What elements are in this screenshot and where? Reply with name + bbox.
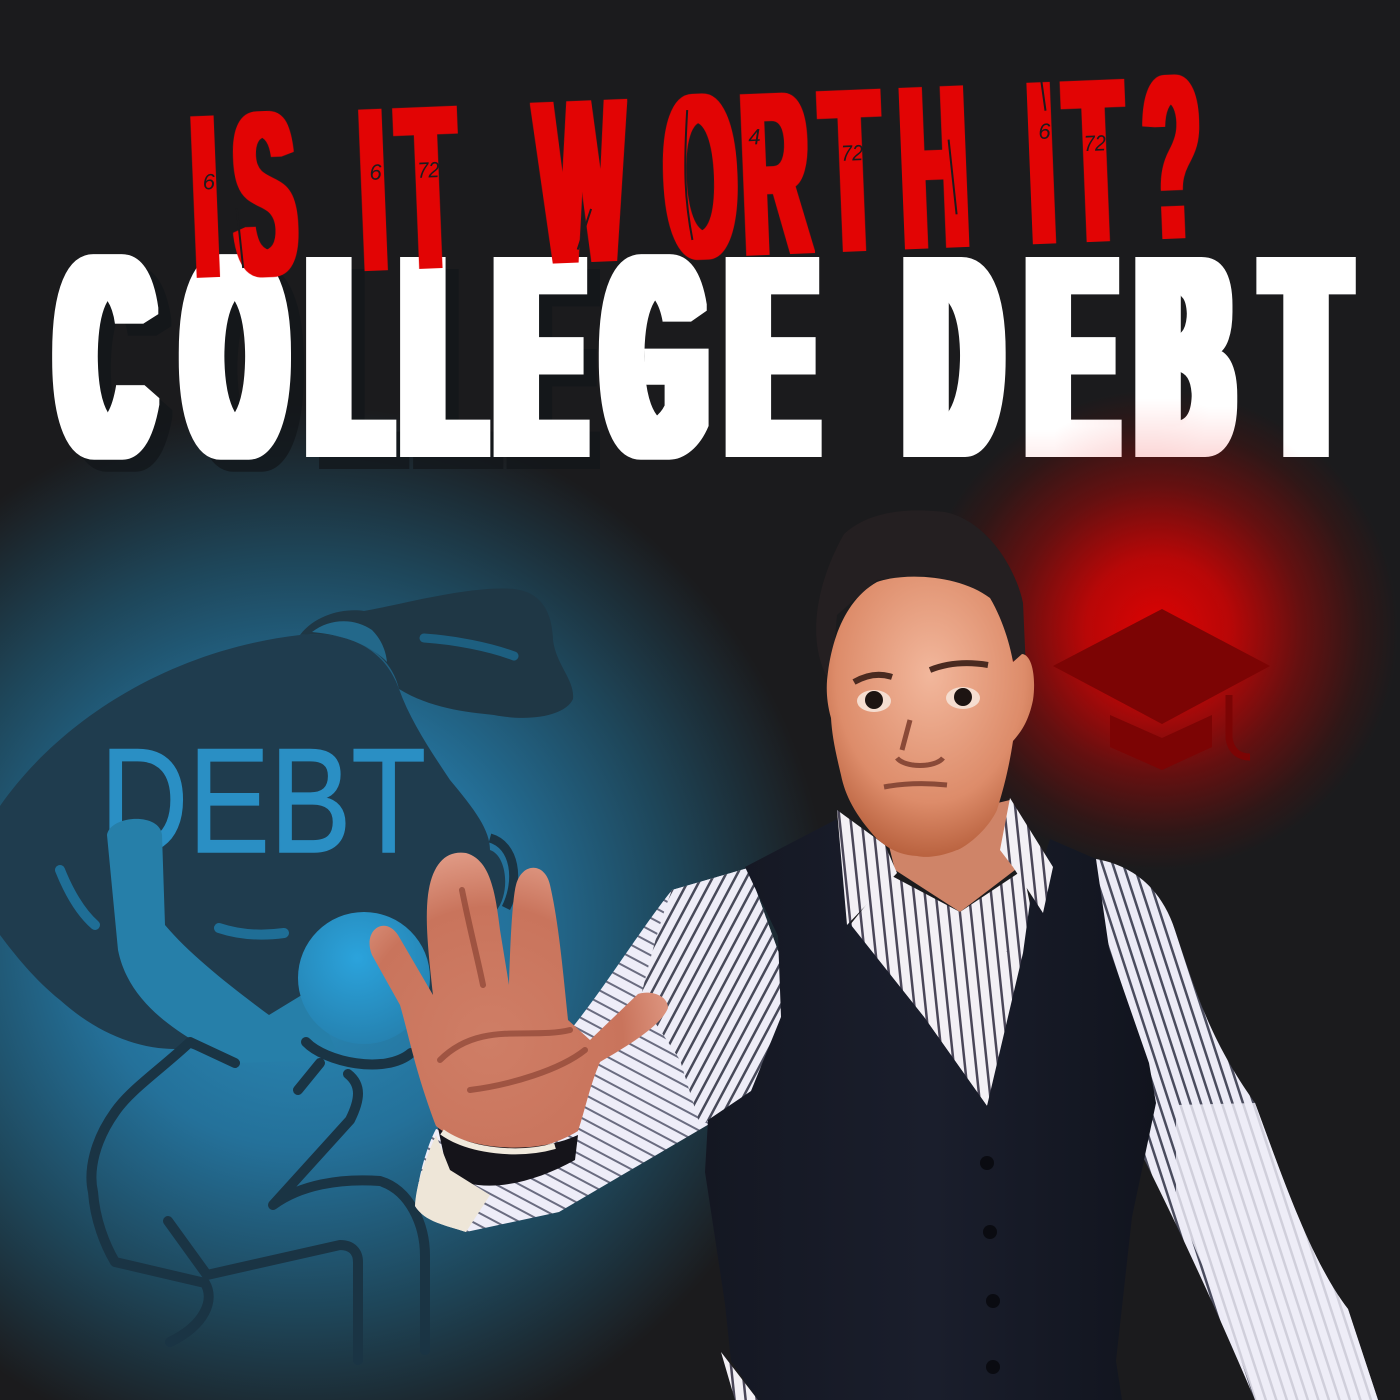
tie loop cutout: [312, 621, 387, 662]
neck: [885, 800, 1015, 912]
distressed texture on title: 72: [841, 140, 864, 166]
blue glow: [0, 400, 840, 1400]
tie highlight: [424, 638, 514, 656]
nose and mouth: [884, 720, 947, 787]
red glow: [918, 390, 1398, 870]
title: college debt: COLLEGE DEBT: [61, 199, 1343, 514]
title: is it worth it: IS IT WORTH IT?: [187, 28, 1206, 327]
bag tie: [300, 588, 573, 718]
distressed texture on title: 4: [748, 124, 761, 150]
figure head: [298, 912, 430, 1044]
washed lower right sleeve: [1176, 1103, 1378, 1400]
debt label: DEBT: [100, 717, 426, 884]
face: [827, 577, 1034, 857]
shirt tail: [721, 1352, 758, 1400]
distressed texture on title: [200, 78, 1109, 269]
left sleeve: [415, 868, 781, 1232]
distressed texture on title: 72: [417, 157, 440, 183]
icon: debt bag illustration: [0, 588, 573, 1360]
hand: [370, 853, 668, 1150]
collar left: [837, 810, 897, 925]
cuff edge: [442, 1132, 555, 1151]
waistcoat buttons: [980, 1156, 1000, 1374]
distressed texture on title: 6: [202, 169, 216, 195]
person: [370, 510, 1378, 1400]
cuff base: [415, 1135, 490, 1232]
bag creases: [60, 870, 284, 935]
upper left sleeve stripes: [640, 868, 781, 1125]
figure arm: [107, 819, 340, 1063]
title shadow: COLLEGE: [74, 211, 825, 526]
cuff: [438, 1128, 578, 1186]
icon: graduation cap: [1053, 609, 1270, 770]
bag bump: [490, 838, 514, 908]
waistcoat: [705, 819, 1156, 1400]
right sleeve: [1096, 859, 1378, 1400]
distressed texture on title: 6: [369, 159, 383, 185]
collar right: [1000, 798, 1053, 913]
finger and palm lines: [440, 890, 585, 1090]
bag body: [0, 634, 505, 1063]
figure outline: [91, 1042, 425, 1360]
shirt front: [850, 870, 1040, 1106]
distressed texture on title: 72: [1083, 130, 1106, 156]
hair: [816, 510, 1026, 675]
distressed texture on title: 6: [1038, 118, 1052, 144]
eyes and brows: [854, 663, 988, 712]
